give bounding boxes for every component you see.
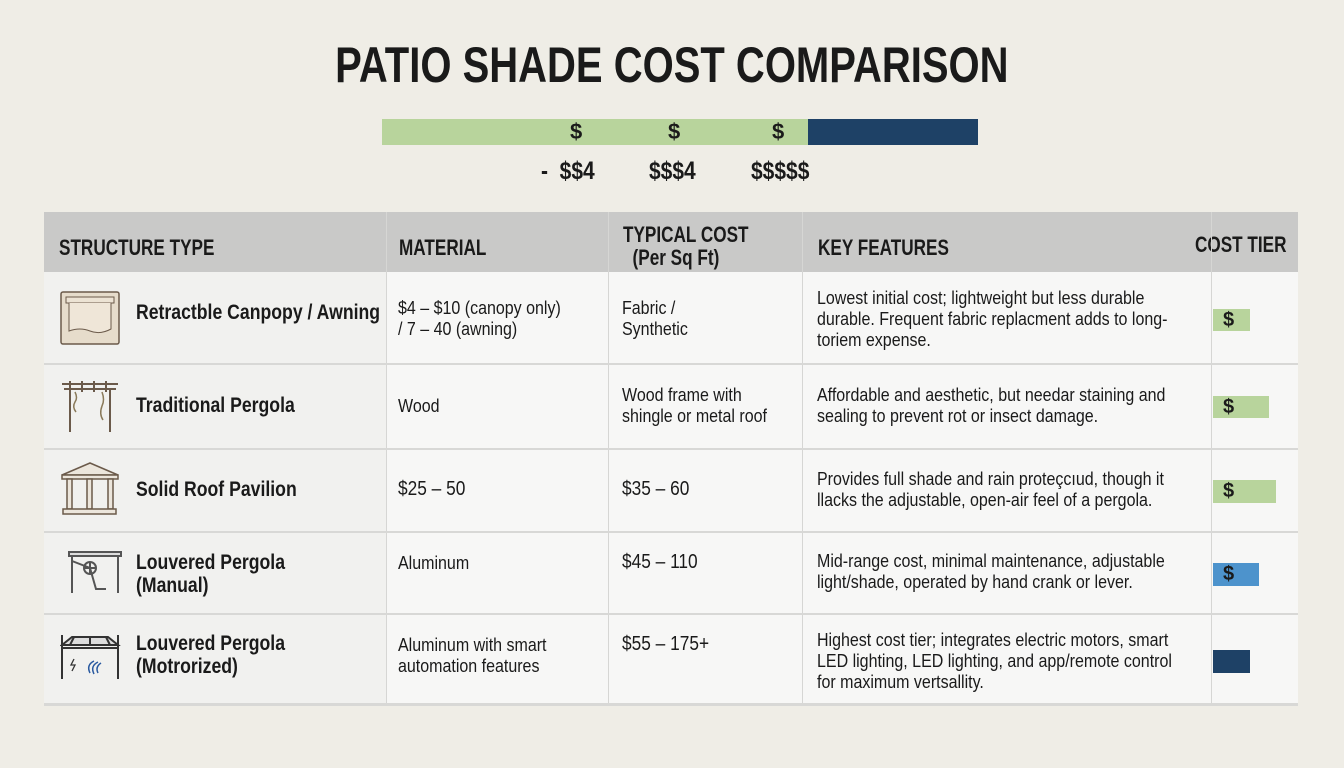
row 1: Fabric / [622,297,675,318]
row 2: Traditional Pergola [136,394,295,417]
cost tier bar: $ [1223,396,1234,418]
cost tier bar [1213,563,1259,586]
table [44,212,1298,706]
row 2: Wood [398,395,440,416]
row 5: (Motrorized) [136,655,238,678]
icon: traditional pergola [62,381,118,432]
header row: (Per Sq Ft) [633,245,719,270]
cost tier bar [1213,650,1250,673]
header row: COST TIER [1195,232,1287,257]
row 5: for maximum vertsallity. [817,671,984,692]
row 3: Solid Roof Pavilion [136,478,297,501]
title: PATIO SHADE COST COMPARISON [335,37,1009,93]
cost tier bar: $ [1223,309,1234,331]
cost scale bar [382,119,978,145]
icon: pavilion [61,462,119,515]
cost scale bar: $ [570,119,582,144]
row 3: $35 – 60 [622,478,689,500]
row 4: Louvered Pergola [136,551,285,574]
row 5: Louvered Pergola [136,632,285,655]
icon: canopy [60,291,120,345]
row 1: $4 – $10 (canopy only) [398,297,561,318]
cost scale bar: $ [772,119,784,144]
cost tier bar [1213,309,1250,331]
row 3 [61,462,1276,515]
row 4: (Manual) [136,574,209,597]
icon: motorized louvered pergola [60,635,121,679]
row 5: automation features [398,655,539,676]
cost tier bar: $ [1223,563,1234,585]
cost tier bar [1213,396,1269,418]
row 1: Retractble Canpopy / Awning [136,301,380,324]
row 2 [62,381,1269,432]
header row: TYPICAL COST [623,222,749,247]
cost tier bar: $ [1223,480,1234,502]
row 5: $55 – 175+ [622,633,709,655]
row 4: Mid-range cost, minimal maintenance, adjustable [817,550,1165,571]
header row: STRUCTURE TYPE [59,235,214,260]
header row: MATERIAL [399,235,486,260]
row 2: Affordable and aesthetic, but needar staining and [817,384,1165,405]
row 2: shingle or metal roof [622,405,767,426]
row 5 [60,629,1250,692]
row 5: Aluminum with smart [398,634,547,655]
row 3: Provides full shade and rain proteçcıud, though it [817,468,1164,489]
icon: manual louvered pergola [68,551,122,593]
text: $$$$$ [751,157,809,185]
text: $$$4 [649,157,696,185]
row 3: llacks the adjustable, open-air feel of a pergola. [817,489,1152,510]
row 1: Synthetic [622,318,688,339]
row 1: / 7 – 40 (awning) [398,318,517,339]
row 4: $45 – 110 [622,551,698,573]
row 4: Aluminum [398,552,469,573]
row 1: toriem expense. [817,329,931,350]
row 1: durable. Frequent fabric replacment adds to long- [817,308,1167,329]
row 5: LED lighting, LED lighting, and app/remote control [817,650,1172,671]
row 2: sealing to prevent rot or insect damage. [817,405,1098,426]
scale labels: - $$4 [541,157,595,185]
row 3: $25 – 50 [398,478,465,500]
cost tier bar [1213,480,1276,503]
row 4 [68,550,1259,597]
row 1: Lowest initial cost; lightweight but less durable [817,287,1144,308]
row 5: Highest cost tier; integrates electric motors, smart [817,629,1168,650]
row 4: light/shade, operated by hand crank or lever. [817,571,1133,592]
cost scale bar: $ [668,119,680,144]
row 2: Wood frame with [622,384,742,405]
header row [44,212,1298,272]
header row: KEY FEATURES [818,235,949,260]
row 1 [60,287,1250,350]
